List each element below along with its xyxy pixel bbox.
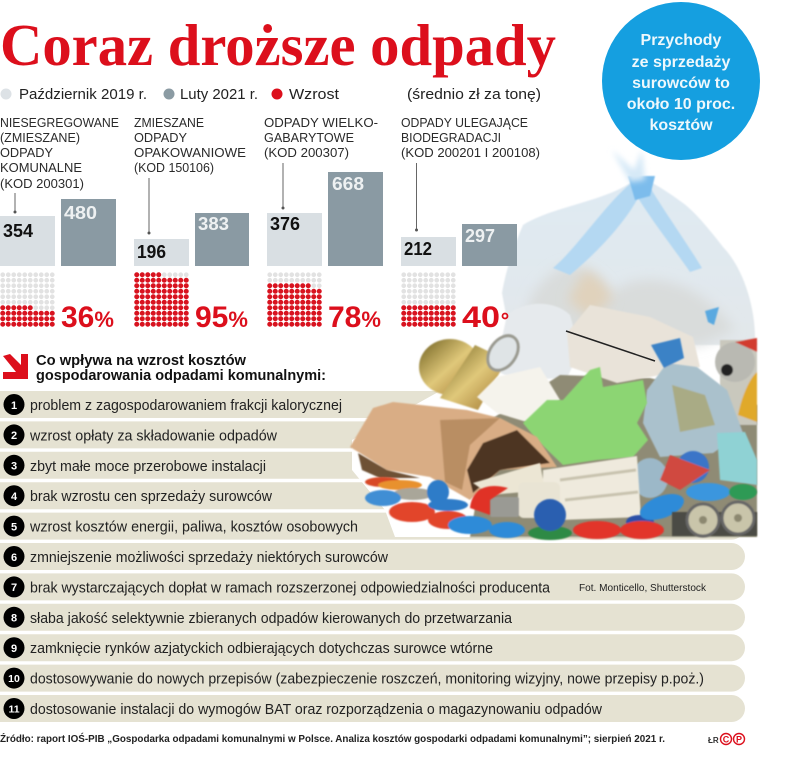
- dot grid 40: [401, 272, 456, 327]
- row 10: [0, 665, 745, 692]
- photo credit: Fot. Monticello, Shutterstock: [579, 582, 707, 594]
- right-hand bottles: [632, 432, 757, 498]
- bars: 383: [198, 214, 229, 234]
- category label: NIESEGREGOWANE: [0, 115, 119, 130]
- callout: revenues circle: kosztów: [649, 117, 713, 134]
- leader line: [148, 178, 150, 234]
- row 10: 10: [8, 673, 20, 685]
- callout: revenues circle: około 10 proc.: [627, 96, 735, 113]
- row 8: 8: [11, 612, 17, 624]
- row 2: wzrost opłaty za składowanie odpadów: [29, 427, 277, 444]
- egg carton dark line: [566, 331, 655, 361]
- leader line: [282, 163, 284, 210]
- cans: [715, 338, 757, 425]
- legend: [0, 86, 541, 103]
- row 11: 11: [8, 704, 20, 716]
- bars: [134, 213, 249, 266]
- title: Coraz droższe odpady: [0, 12, 556, 78]
- callout: revenues circle: [602, 2, 760, 160]
- legend: Luty 2021 r.: [180, 86, 258, 103]
- row 8: słaba jakość selektywnie zbieranych odpadów kierowanych do przetwarzania: [30, 610, 513, 627]
- bars: 354: [3, 221, 33, 241]
- row 7: brak wystarczających dopłat w ramach rozszerzonej odpowiedzialności producenta: [30, 579, 551, 596]
- white cup: [477, 367, 560, 423]
- bars: 668: [332, 174, 364, 194]
- row 9: 9: [11, 643, 17, 655]
- row 3: 3: [11, 460, 17, 472]
- row 6: [0, 543, 745, 570]
- category label: ZMIESZANE: [134, 115, 204, 130]
- category label: [0, 115, 119, 191]
- panel: biodegradacja: [401, 115, 540, 334]
- pile shadows: [470, 375, 757, 537]
- logo: P: [736, 734, 742, 744]
- row 2: 2: [11, 430, 17, 442]
- gold bulb: [419, 330, 525, 410]
- leader line: [415, 163, 418, 232]
- row 5: 5: [11, 522, 17, 534]
- row 1: problem z zagospodarowaniem frakcji kalorycznej: [30, 397, 342, 414]
- clear jar: [495, 304, 580, 380]
- category label: ODPADY WIELKO-: [264, 115, 378, 130]
- bars: [401, 224, 517, 266]
- panel: wielkogabarytowe: [264, 115, 383, 334]
- category label: (KOD 200307): [264, 145, 349, 160]
- panel: opakowaniowe: [134, 115, 249, 334]
- dot grid 95: [134, 272, 189, 327]
- category label: GABARYTOWE: [264, 130, 354, 145]
- list of causes: [0, 391, 745, 722]
- cardboard box: [350, 402, 557, 500]
- row 5: [0, 513, 745, 540]
- row 4: brak wzrostu cen sprzedaży surowców: [30, 488, 272, 505]
- dot grid 36: [0, 272, 55, 327]
- row 11: [0, 695, 745, 722]
- logo: C: [723, 734, 730, 744]
- row 1: [0, 391, 745, 418]
- row 3: zbyt małe moce przerobowe instalacji: [30, 458, 266, 475]
- row 11: dostosowanie instalacji do wymogów BAT oraz rozporządzenia o magazynowaniu odpadów: [30, 701, 602, 718]
- row 8: [0, 604, 745, 631]
- row 4: 4: [11, 491, 18, 503]
- legend: Październik 2019 r.: [19, 86, 147, 103]
- category label: (KOD 200201 I 200108): [401, 145, 540, 160]
- bars: [267, 172, 383, 266]
- plastic bottle: [643, 338, 743, 457]
- bars: 196: [137, 242, 166, 262]
- category label: [401, 115, 540, 160]
- row 5: wzrost kosztów energii, paliwa, kosztów osobowych: [29, 519, 358, 536]
- row 9: [0, 634, 745, 661]
- heading: causes: [3, 353, 247, 379]
- bars: 376: [270, 214, 300, 234]
- callout: revenues circle: ze sprzedaży: [632, 54, 730, 71]
- batteries: [672, 502, 757, 536]
- bars: 297: [465, 226, 495, 246]
- row 6: zmniejszenie możliwości sprzedaży niektórych surowców: [30, 549, 388, 566]
- row 7: 7: [11, 582, 17, 594]
- egg carton: [567, 305, 700, 383]
- percent: 95%: [195, 301, 248, 334]
- category label: ODPADY: [0, 145, 53, 160]
- row 1: 1: [11, 400, 17, 412]
- category label: BIODEGRADACJI: [401, 130, 501, 145]
- legend: Wzrost: [289, 86, 340, 103]
- heading: causes: Co wpływa na wzrost kosztów: [36, 353, 247, 369]
- logo: ŁR: [708, 736, 719, 745]
- callout: revenues circle: surowców to: [632, 75, 730, 92]
- panel: niesegregowane: [0, 115, 119, 334]
- row 6: 6: [11, 552, 17, 564]
- category label: [264, 115, 378, 160]
- heading line 2: gospodarowania odpadami komunalnymi:: [36, 368, 326, 384]
- row 9: zamknięcie rynków azjatyckich odbierających dotychczas surowce wtórne: [30, 640, 493, 657]
- percent: 78%: [328, 301, 381, 334]
- fluorescent lamp: [473, 456, 641, 520]
- leader line: [14, 193, 16, 214]
- icon: red arrow: [3, 354, 28, 379]
- category label: (KOD 200301): [0, 176, 84, 191]
- row 3: [0, 452, 745, 479]
- legend: (średnio zł za tonę): [407, 86, 541, 103]
- percent: 36%: [61, 301, 114, 334]
- bars: 212: [404, 239, 432, 259]
- category label: (ZMIESZANE): [0, 130, 80, 145]
- photo backing: [352, 300, 757, 537]
- callout: revenues circle: Przychody: [641, 32, 722, 49]
- category label: ODPADY: [134, 130, 187, 145]
- plastic bag: [502, 150, 757, 345]
- row 10: dostosowywanie do nowych przepisów (zabezpieczenie roszczeń, monitoring wizyjny, nowe przepisy p.poż.): [30, 671, 704, 688]
- logo: [708, 734, 744, 745]
- category label: (KOD 150106): [134, 160, 214, 175]
- green bag: [523, 367, 648, 465]
- category label: ODPADY ULEGAJĄCE: [401, 115, 528, 130]
- dot grid 78: [267, 272, 322, 327]
- source note: Źródło: raport IOŚ-PIB „Gospodarka odpadami komunalnymi w Polsce. Analiza kosztów gospodarki odpadami komunalnymi”; sierpień 2021 r.: [0, 732, 665, 745]
- row 7: [0, 573, 745, 600]
- photo: pile of waste: [350, 150, 757, 540]
- row 2: [0, 421, 745, 448]
- category label: [134, 115, 246, 175]
- bars: [0, 199, 116, 266]
- bars: 480: [64, 203, 97, 223]
- row 4: [0, 482, 745, 509]
- bottle caps: [365, 477, 757, 540]
- percent: 40: [462, 301, 500, 334]
- category label: KOMUNALNE: [0, 160, 82, 175]
- category label: OPAKOWANIOWE: [134, 145, 246, 160]
